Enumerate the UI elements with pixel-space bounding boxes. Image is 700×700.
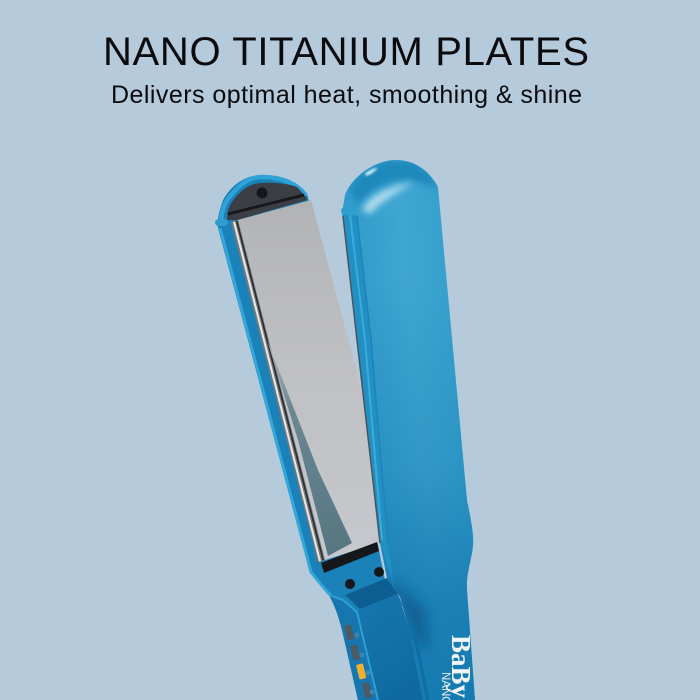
darker dome bbox=[350, 160, 438, 205]
right arm surface detail bbox=[343, 160, 438, 700]
left arm top rim bbox=[221, 177, 306, 220]
shoulder sheen bbox=[362, 182, 414, 214]
right arm body bbox=[342, 160, 475, 700]
titanium plate bbox=[238, 200, 378, 560]
brand text bbox=[439, 635, 476, 700]
base screws bbox=[345, 567, 384, 589]
button face bbox=[330, 597, 378, 700]
cap groove bbox=[228, 195, 304, 214]
handle ridge bbox=[332, 596, 378, 700]
subtitle: Delivers optimal heat, smoothing & shine bbox=[111, 81, 582, 109]
inner edge facet bbox=[343, 212, 395, 590]
handle panel bbox=[357, 594, 423, 700]
background sliver between arms bbox=[402, 606, 411, 634]
facet dark line bbox=[357, 216, 388, 545]
dark edge of right arm bbox=[343, 216, 380, 543]
left arm body bbox=[218, 175, 423, 700]
black plate cap bbox=[227, 183, 307, 220]
title: NANO TITANIUM PLATES bbox=[103, 30, 589, 74]
control buttons bbox=[344, 624, 374, 699]
lower facet line bbox=[412, 622, 428, 700]
pin on left arm bbox=[215, 219, 228, 226]
right arm lower shading bbox=[342, 160, 475, 700]
left arm of straightener bbox=[215, 175, 423, 700]
hinge shadow bbox=[345, 578, 398, 609]
pin on right arm bbox=[341, 207, 356, 215]
left arm bright outer edge bbox=[220, 228, 331, 596]
hinge shadow on arm bbox=[390, 578, 431, 648]
right arm of straightener bbox=[341, 160, 476, 700]
cap screw bbox=[256, 188, 268, 198]
plate reflection bbox=[267, 340, 352, 556]
top highlight spot bbox=[365, 168, 378, 176]
plate side rails bbox=[231, 220, 325, 563]
black strip at base of plate bbox=[321, 542, 379, 573]
BaBy logo: BaBy bbox=[446, 635, 476, 699]
facet light line bbox=[350, 215, 382, 540]
